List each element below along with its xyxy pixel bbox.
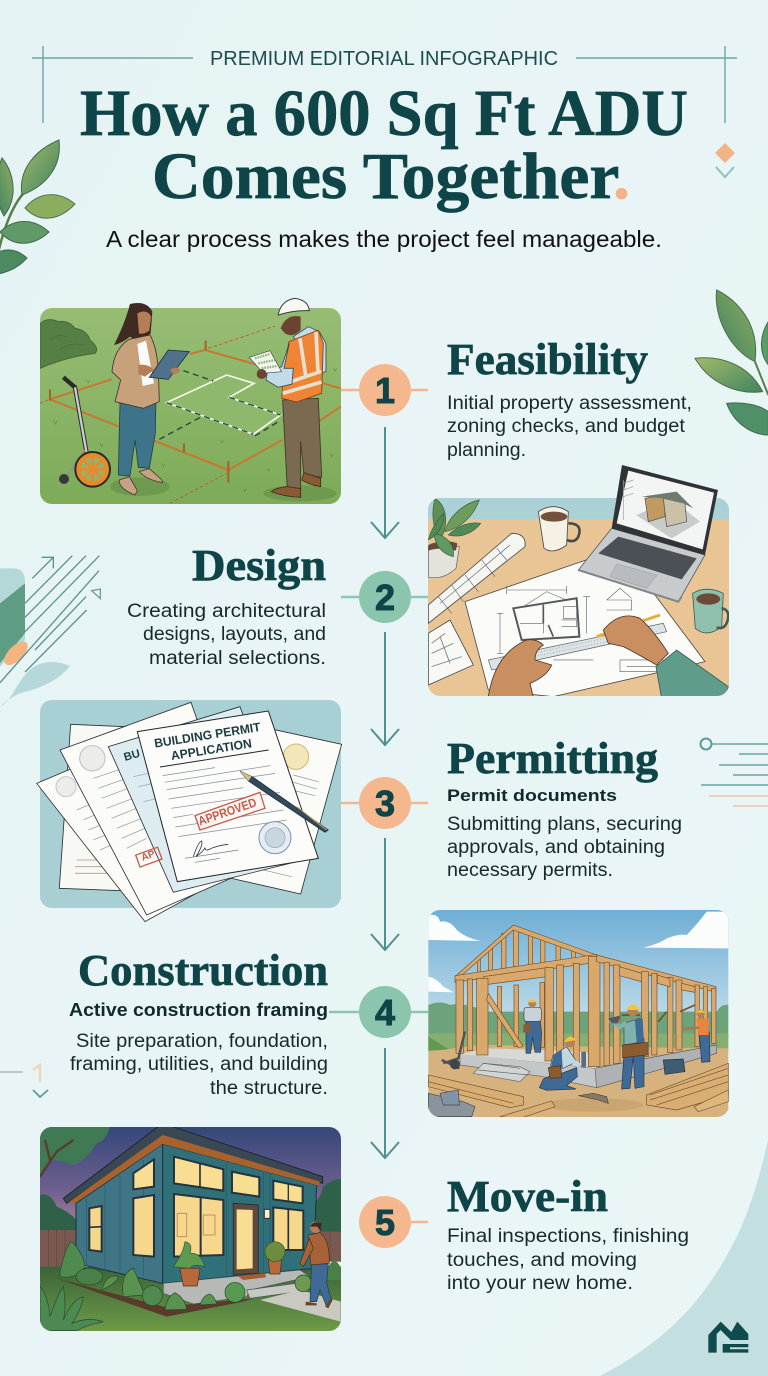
figure: person walking home <box>300 1222 333 1308</box>
text block: Permitting: necessary permits. <box>447 860 613 881</box>
callout: step 5 number <box>359 1196 428 1248</box>
icon: measuring wheel <box>59 377 110 487</box>
icon: house logo <box>708 1322 748 1353</box>
decoration: diamond and chevron <box>715 143 735 177</box>
eyebrow label: PREMIUM EDITORIAL INFOGRAPHIC <box>210 48 558 70</box>
callout: step 3 number: 3 <box>375 783 395 824</box>
decoration: right leaves <box>695 290 768 435</box>
text block: Design: Creating architectural <box>127 601 326 622</box>
text block: Design <box>127 541 326 669</box>
text block: Design: designs, layouts, and <box>143 624 326 645</box>
figure: inspector in orange vest <box>249 298 326 497</box>
arrow: step 4 to 5 <box>371 1048 399 1158</box>
panel: step 3 illustration, permit documents: APPROVED <box>196 796 258 828</box>
panel: step 4 illustration, construction framing <box>428 910 728 1118</box>
title <box>80 77 688 213</box>
text block: Construction: Construction <box>78 946 328 995</box>
callout: step 4 number: 4 <box>375 992 395 1033</box>
text block: Move-in: Move-in <box>447 1172 608 1221</box>
text block: Permitting: Permitting <box>447 734 658 783</box>
figure: workers <box>523 999 710 1090</box>
decoration: right mid lines <box>700 738 768 806</box>
text block: Design: Design <box>192 541 326 590</box>
title: Comes Together. <box>152 140 630 213</box>
corner accent shape <box>600 1140 768 1376</box>
text block: Construction: the structure. <box>210 1078 328 1099</box>
text block: Construction: Site preparation, foundation, <box>76 1031 328 1052</box>
decoration: left mid shapes <box>0 556 100 707</box>
text block: Move-in: into your new home. <box>447 1273 633 1294</box>
decoration: left lower marks <box>0 1065 48 1097</box>
panel: step 3 illustration, permit documents: APPLICATION <box>170 736 253 763</box>
text block: Feasibility: planning. <box>447 440 526 461</box>
decoration: top-left leaves <box>0 140 75 274</box>
text block: Permitting <box>447 734 682 881</box>
callout: step 1 number: 1 <box>375 370 395 411</box>
text block: Permitting: Submitting plans, securing <box>447 814 682 835</box>
callout: step 1 number <box>341 364 428 416</box>
title: How a 600 Sq Ft ADU <box>80 77 688 150</box>
text block: Move-in: touches, and moving <box>447 1250 637 1271</box>
text block: Feasibility: zoning checks, and budget <box>447 416 686 437</box>
arrow: step 3 to 4 <box>371 838 399 950</box>
callout: step 5 number: 5 <box>375 1202 395 1243</box>
text block: Permitting: approvals, and obtaining <box>447 837 665 858</box>
subtitle: A clear process makes the project feel manageable. <box>106 226 662 252</box>
panel: step 3 illustration, permit documents: BU <box>123 748 142 764</box>
panel: step 5 illustration, finished ADU at dusk <box>40 1123 344 1332</box>
arrow: step 1 to 2 <box>371 427 399 538</box>
text block: Move-in: Final inspections, finishing <box>447 1226 689 1247</box>
callout: step 4 number <box>329 986 428 1038</box>
text block: Construction: framing, utilities, and building <box>70 1054 328 1075</box>
panel: step 2 illustration, design desk <box>428 465 729 698</box>
text block: Permitting: Permit documents <box>447 786 617 805</box>
text block: Design: material selections. <box>149 648 326 669</box>
panel: step 3 illustration, permit documents: AP <box>140 849 157 864</box>
header rule lines <box>32 46 737 123</box>
figure: woman with clipboard <box>112 303 189 495</box>
text block: Feasibility: Feasibility <box>447 335 648 384</box>
panel: step 3 illustration, permit documents: BUILDING PERMIT <box>153 720 262 751</box>
text block: Move-in <box>447 1172 689 1294</box>
icon: laptop with 3D house model <box>578 465 718 602</box>
callout: step 3 number <box>341 777 428 829</box>
callout: step 2 number: 2 <box>375 577 395 618</box>
panel: step 1 illustration, site assessment <box>40 298 341 504</box>
panel: step 3 illustration, permit documents <box>37 700 342 922</box>
callout: step 2 number <box>341 571 428 623</box>
arrow: step 2 to 3 <box>371 632 399 745</box>
text block: Construction: Active construction framing <box>69 1000 328 1020</box>
text block: Construction <box>69 946 328 1099</box>
text block: Feasibility <box>447 335 692 461</box>
text block: Feasibility: Initial property assessment, <box>447 393 692 414</box>
